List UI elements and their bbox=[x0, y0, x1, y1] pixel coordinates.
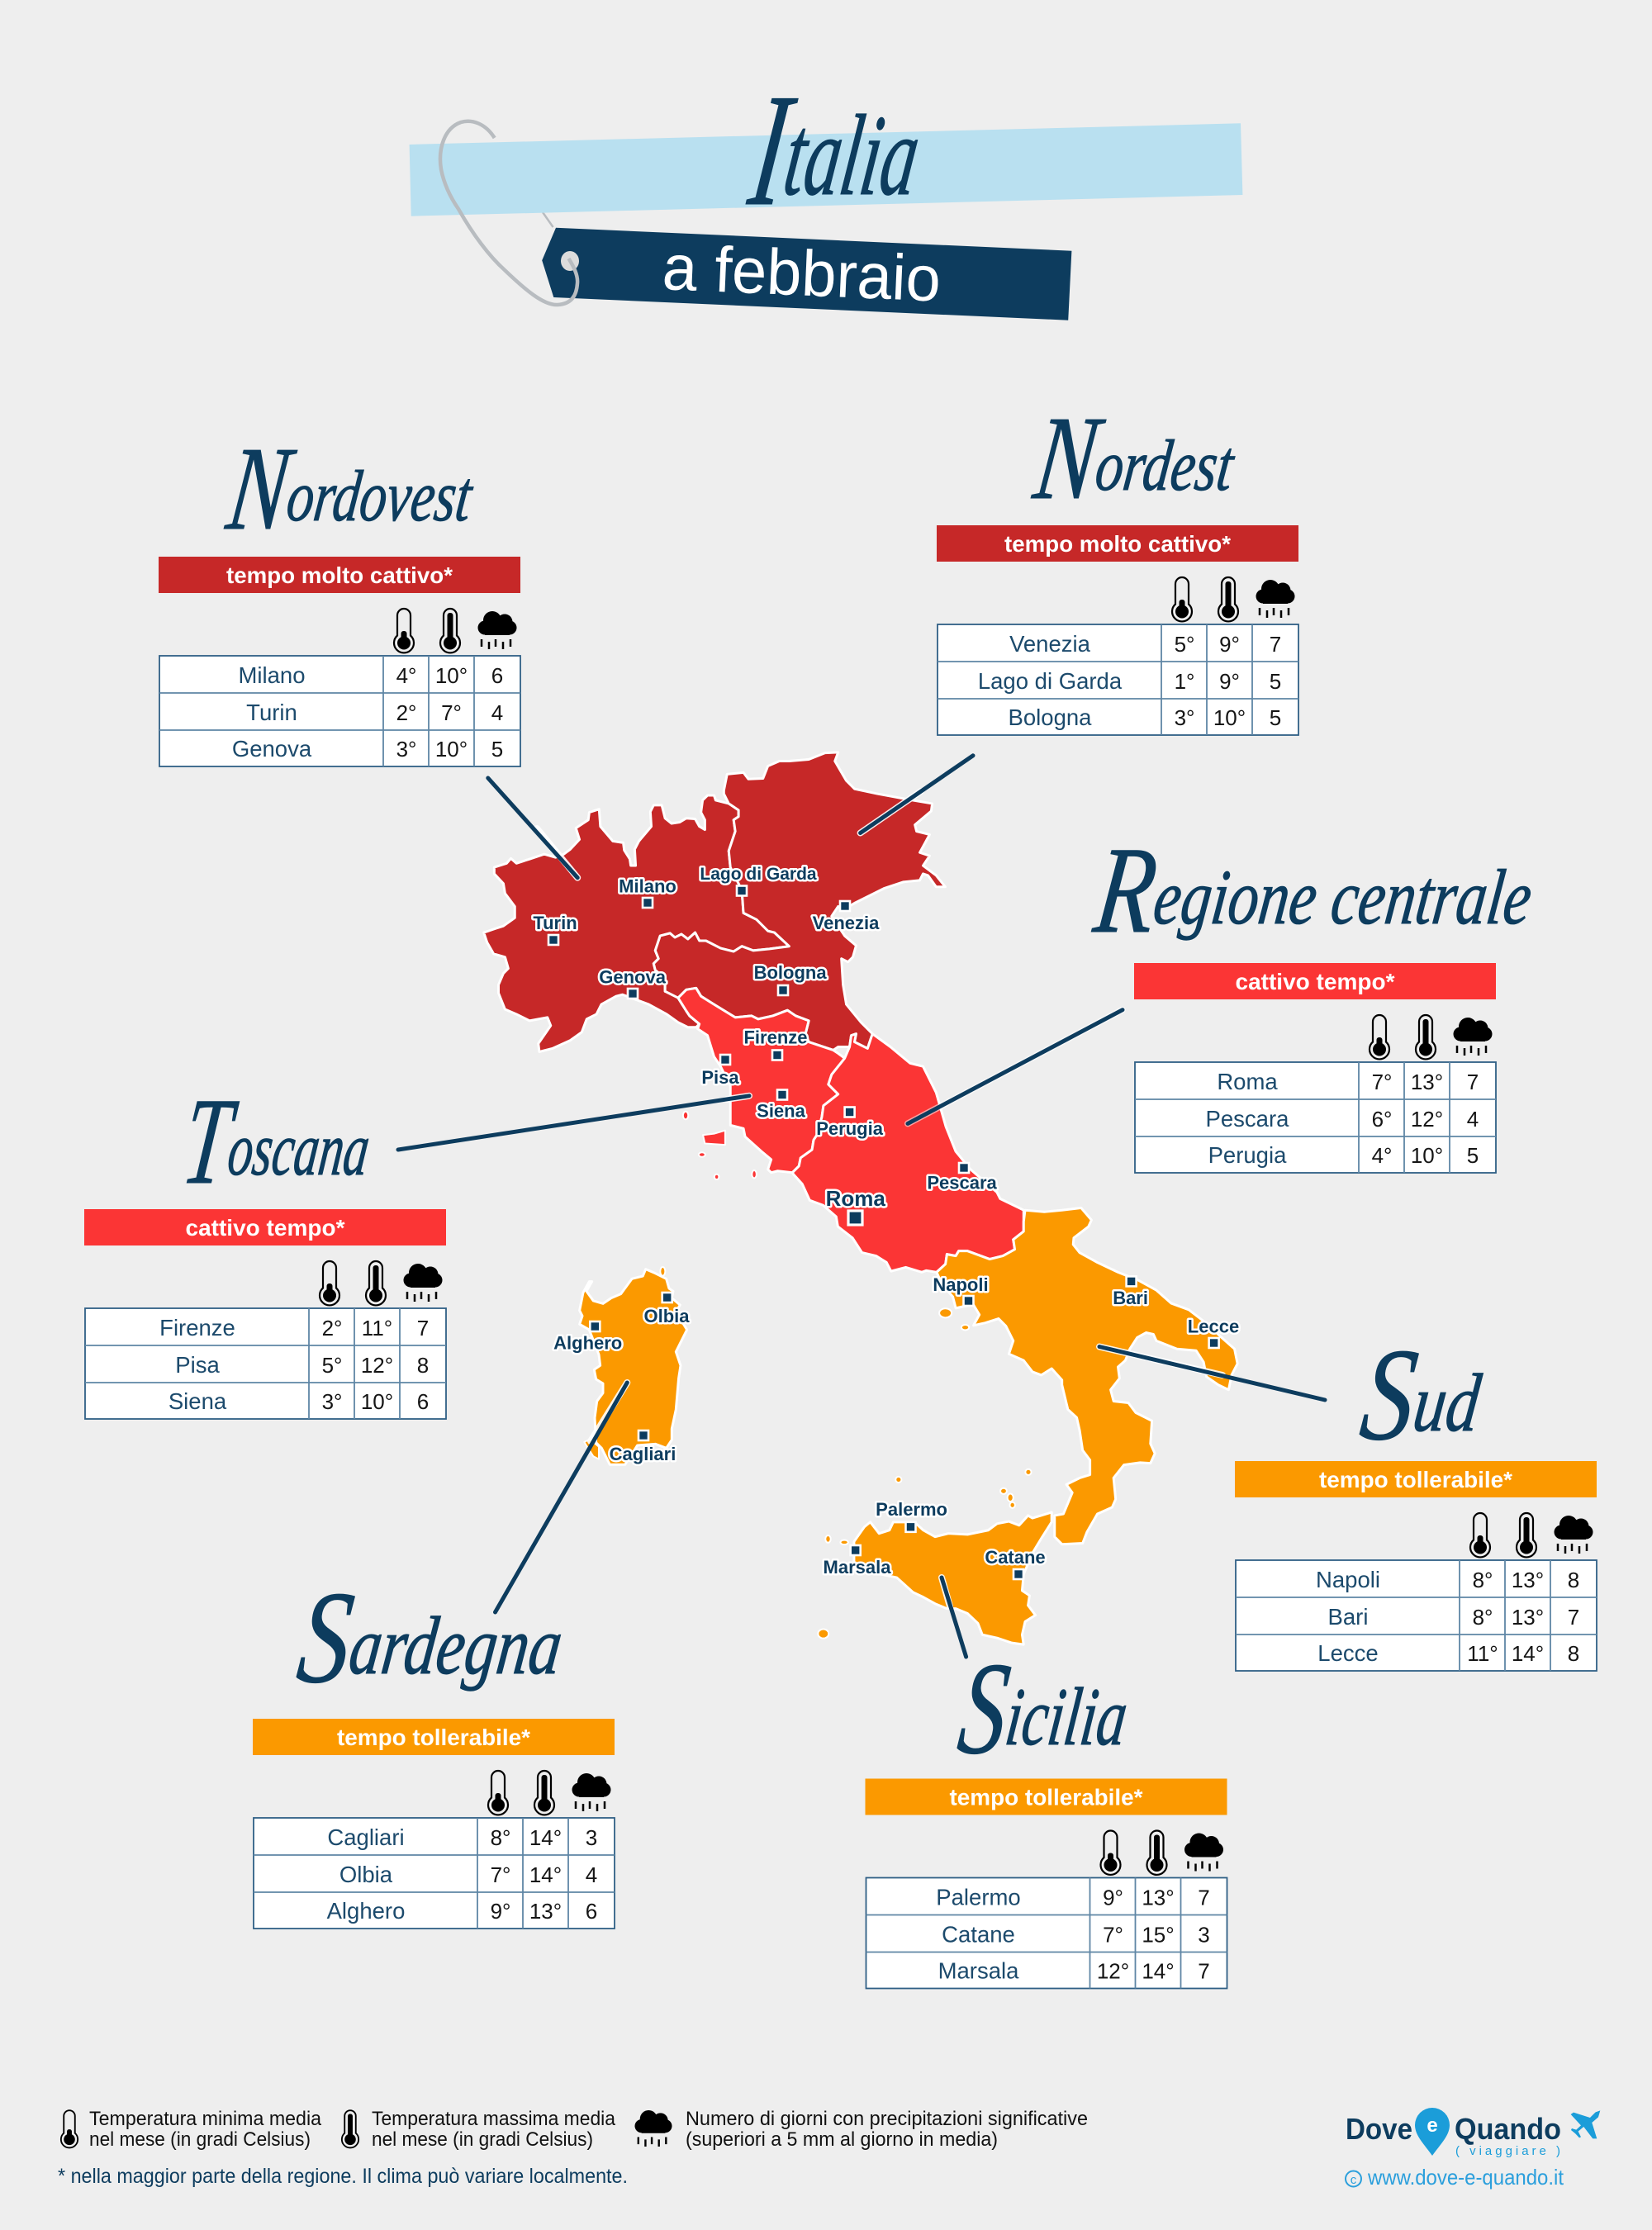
rating band bbox=[253, 1719, 615, 1755]
climate table: Marsala bbox=[938, 1957, 1019, 1984]
climate table: 7° bbox=[1372, 1070, 1392, 1094]
climate table: Perugia bbox=[1208, 1142, 1287, 1168]
icons: min temp, max temp, rain days bbox=[394, 609, 517, 652]
rating band bbox=[159, 557, 520, 593]
climate table: Bari bbox=[1328, 1604, 1368, 1630]
climate table bbox=[938, 624, 1298, 735]
panel: Nordovest bbox=[159, 422, 520, 766]
city: Alghero: Alghero bbox=[553, 1333, 622, 1353]
heading: Sud: ud bbox=[1408, 1357, 1486, 1449]
line: Toscana bbox=[398, 1096, 749, 1150]
tag cord bbox=[440, 121, 577, 305]
city: Alghero bbox=[553, 1321, 622, 1353]
city: Siena bbox=[757, 1090, 806, 1122]
climate table: 12° bbox=[1097, 1959, 1129, 1984]
wordmark: Dove: Dove bbox=[1346, 2112, 1412, 2146]
heading: Regione centrale: R bbox=[1088, 822, 1164, 959]
climate table: 11° bbox=[1467, 1641, 1498, 1666]
climate table: 5 bbox=[1270, 669, 1281, 694]
city: Bari: Bari bbox=[1113, 1288, 1148, 1308]
panel: Regione centrale bbox=[1088, 822, 1540, 1173]
climate table: 5 bbox=[1467, 1143, 1479, 1168]
climate table: 8 bbox=[417, 1353, 429, 1378]
icons: min temp, max temp, rain days bbox=[1370, 1015, 1492, 1059]
climate table: 14° bbox=[1142, 1959, 1175, 1984]
rating band bbox=[1235, 1461, 1597, 1497]
panel: Toscana bbox=[84, 1073, 446, 1419]
city: Cagliari bbox=[610, 1431, 676, 1464]
climate table: 8 bbox=[1568, 1568, 1579, 1592]
city: Roma bbox=[826, 1186, 885, 1225]
climate table: 10° bbox=[361, 1389, 393, 1414]
rating band: tempo tollerabile* bbox=[950, 1784, 1143, 1810]
city: Pescara: Pescara bbox=[927, 1173, 998, 1193]
climate table: 2° bbox=[396, 700, 416, 725]
city: Siena: Siena bbox=[757, 1100, 806, 1122]
climate table: 13° bbox=[1512, 1605, 1544, 1630]
climate table: 5 bbox=[1270, 705, 1281, 730]
rating band: tempo tollerabile* bbox=[1319, 1467, 1512, 1492]
climate table: Turin bbox=[246, 700, 297, 725]
wordmark: Quando: Quando bbox=[1455, 2112, 1561, 2146]
climate table: 12° bbox=[361, 1353, 393, 1378]
line: Nordest bbox=[861, 756, 973, 833]
subtitle: a febbraio bbox=[661, 230, 942, 316]
city: Turin: Turin bbox=[533, 913, 577, 933]
climate table: 3° bbox=[396, 737, 416, 762]
climate table: 4° bbox=[1372, 1143, 1392, 1168]
city: Perugia bbox=[816, 1107, 884, 1139]
climate table: Palermo bbox=[936, 1885, 1021, 1910]
climate table: 14° bbox=[529, 1825, 562, 1850]
climate table: 8° bbox=[1473, 1568, 1493, 1592]
legend bbox=[58, 2108, 1088, 2188]
copyright symbol bbox=[1346, 2171, 1361, 2187]
climate table: Venezia bbox=[1009, 631, 1091, 657]
region: Toscana bbox=[678, 988, 845, 1179]
climate table: 10° bbox=[435, 737, 468, 762]
tag hole bbox=[561, 251, 579, 271]
climate table: 4° bbox=[396, 663, 416, 688]
heading: Nordovest: ordovest bbox=[282, 456, 477, 537]
line: Sicilia bbox=[942, 1578, 966, 1657]
rating band: tempo tollerabile* bbox=[337, 1725, 530, 1750]
region: Sardegna bbox=[580, 1267, 687, 1464]
legend item: maximum temperature: Temperatura massima media bbox=[372, 2108, 616, 2130]
climate table: 2° bbox=[322, 1316, 342, 1340]
climate table: Alghero bbox=[327, 1898, 405, 1924]
icons: min temp, max temp, rain days bbox=[1100, 1830, 1223, 1875]
climate table: 7 bbox=[1467, 1070, 1479, 1094]
climate table: 1° bbox=[1175, 669, 1194, 694]
climate table: 7° bbox=[1103, 1923, 1123, 1948]
rating band: cattivo tempo* bbox=[185, 1215, 345, 1241]
climate table: 3 bbox=[586, 1825, 597, 1850]
climate table: Siena bbox=[169, 1388, 227, 1414]
panel: Sicilia bbox=[866, 1635, 1227, 1989]
city: Pisa bbox=[701, 1055, 739, 1088]
climate table: Pescara bbox=[1206, 1106, 1289, 1132]
city: Napoli: Napoli bbox=[933, 1274, 989, 1295]
heading: Nordovest: N bbox=[220, 422, 301, 555]
panel: Nordest bbox=[937, 391, 1298, 735]
city: Bari bbox=[1113, 1276, 1148, 1308]
icons: min temp, max temp, rain days bbox=[488, 1771, 611, 1815]
city: Venezia: Venezia bbox=[813, 913, 880, 933]
climate table: 12° bbox=[1411, 1107, 1443, 1132]
climate table bbox=[254, 1818, 615, 1929]
climate table: 5° bbox=[322, 1353, 342, 1378]
city: Cagliari: Cagliari bbox=[610, 1444, 676, 1464]
legend item: maximum temperature: nel mese (in gradi Celsius) bbox=[372, 2128, 593, 2151]
climate table: 8° bbox=[1473, 1605, 1493, 1630]
website: www.dove-e-quando.it bbox=[1367, 2165, 1564, 2190]
region: Sud bbox=[895, 1208, 1237, 1544]
rating band bbox=[1134, 963, 1496, 999]
copyright symbol: c bbox=[1351, 2173, 1357, 2187]
climate table: 10° bbox=[1411, 1143, 1443, 1168]
climate table: 10° bbox=[435, 663, 468, 688]
climate table: 13° bbox=[529, 1899, 562, 1924]
price tag bbox=[542, 228, 1071, 320]
climate table: 5 bbox=[491, 737, 503, 762]
city: Olbia bbox=[643, 1293, 690, 1326]
title block bbox=[410, 61, 1242, 320]
climate table: 4 bbox=[1467, 1107, 1479, 1132]
icons: min temp, max temp, rain days bbox=[1470, 1513, 1593, 1557]
climate table: 6 bbox=[417, 1389, 429, 1414]
heading: Toscana: T bbox=[177, 1073, 243, 1210]
climate table: Catane bbox=[942, 1921, 1015, 1948]
climate table bbox=[85, 1308, 446, 1419]
climate table: 4 bbox=[491, 700, 503, 725]
city: Bologna: Bologna bbox=[754, 962, 827, 983]
climate table: 7 bbox=[417, 1316, 429, 1340]
icon: location pin: e bbox=[1427, 2114, 1438, 2137]
climate table bbox=[866, 1878, 1227, 1989]
legend item: minimum temperature bbox=[61, 2108, 322, 2151]
icons: min temp, max temp, rain days bbox=[1172, 577, 1295, 621]
region: Regione centrale bbox=[792, 1034, 1023, 1272]
rating band bbox=[866, 1779, 1227, 1815]
city: Palermo: Palermo bbox=[876, 1499, 947, 1520]
city: Marsala bbox=[824, 1545, 891, 1578]
city: Turin bbox=[533, 913, 577, 945]
city: Pisa: Pisa bbox=[701, 1067, 739, 1088]
climate table: 7 bbox=[1198, 1885, 1210, 1910]
rating band: tempo molto cattivo* bbox=[1004, 531, 1231, 557]
city: Milano: Milano bbox=[619, 875, 676, 897]
city: Lecce: Lecce bbox=[1188, 1317, 1239, 1336]
title ribbon bbox=[410, 123, 1242, 216]
heading: Sardegna: ardegna bbox=[344, 1600, 567, 1691]
climate table: 9° bbox=[1219, 669, 1240, 694]
climate table: Firenze bbox=[159, 1315, 235, 1340]
climate table: 3° bbox=[1175, 705, 1194, 730]
heading: Nordest: N bbox=[1027, 391, 1110, 524]
region: Nordest bbox=[653, 752, 945, 1050]
tagline: ( viaggiare ) bbox=[1455, 2144, 1560, 2158]
city: Bologna bbox=[754, 962, 827, 995]
panel: Sardegna bbox=[253, 1564, 615, 1929]
icon: plane bbox=[1571, 2110, 1600, 2138]
heading: Regione centrale: egione centrale bbox=[1149, 853, 1536, 941]
legend item: rain days bbox=[634, 2108, 1088, 2151]
climate table bbox=[159, 656, 520, 766]
rating band bbox=[937, 525, 1298, 562]
climate table: Pisa bbox=[175, 1352, 220, 1378]
line: Sud bbox=[1099, 1346, 1325, 1400]
city: Lecce bbox=[1188, 1317, 1239, 1348]
panel: Sud bbox=[1235, 1321, 1597, 1671]
city markers and labels bbox=[533, 865, 1239, 1579]
climate table: 13° bbox=[1512, 1568, 1544, 1592]
legend item: rain days: (superiori a 5 mm al giorno in media) bbox=[686, 2128, 998, 2151]
climate table: Bologna bbox=[1009, 705, 1092, 730]
climate table: 7° bbox=[441, 700, 462, 725]
climate table: Cagliari bbox=[327, 1824, 405, 1850]
city: Perugia: Perugia bbox=[816, 1118, 884, 1139]
city: Genova bbox=[599, 966, 667, 999]
climate table: Roma bbox=[1217, 1069, 1278, 1094]
climate table: 14° bbox=[1512, 1641, 1544, 1666]
climate table: 3 bbox=[1198, 1923, 1210, 1948]
climate table: 3° bbox=[322, 1389, 342, 1414]
city: Catane: Catane bbox=[985, 1547, 1046, 1568]
tag cord stub bbox=[543, 212, 553, 227]
climate table: 5° bbox=[1175, 632, 1194, 657]
city: Firenze bbox=[743, 1027, 808, 1060]
climate table: 7 bbox=[1270, 632, 1281, 657]
leader lines bbox=[398, 756, 1325, 1657]
heading: Sicilia: S bbox=[952, 1635, 1017, 1782]
rating band bbox=[84, 1209, 446, 1245]
climate table: Lago di Garda bbox=[978, 668, 1123, 694]
climate table: 14° bbox=[529, 1862, 562, 1887]
city: Lago di Garda: Lago di Garda bbox=[700, 865, 817, 884]
city: Napoli bbox=[933, 1274, 989, 1306]
line: Regione centrale bbox=[908, 1010, 1123, 1123]
climate table: 7 bbox=[1568, 1605, 1579, 1630]
climate table: 6 bbox=[586, 1899, 597, 1924]
climate table: 15° bbox=[1142, 1923, 1175, 1948]
climate table: 7° bbox=[491, 1862, 510, 1887]
climate table: 10° bbox=[1213, 705, 1246, 730]
footnote: * nella maggior parte della regione. Il clima può variare localmente. bbox=[58, 2165, 628, 2188]
title: Italia: I bbox=[741, 61, 804, 240]
logo: Dove e Quando bbox=[1346, 2108, 1600, 2190]
line: Nordovest bbox=[488, 778, 577, 878]
heading: Sardegna: S bbox=[291, 1564, 360, 1710]
rating band: cattivo tempo* bbox=[1236, 969, 1395, 994]
climate table: 9° bbox=[491, 1899, 510, 1924]
legend item: rain days: Numero di giorni con precipitazioni significative bbox=[686, 2108, 1088, 2130]
climate table: 8° bbox=[491, 1825, 510, 1850]
line: Sardegna bbox=[496, 1383, 627, 1612]
rating band: tempo molto cattivo* bbox=[226, 562, 453, 588]
map of Italy bbox=[484, 752, 1237, 1644]
city: Roma: Roma bbox=[826, 1186, 885, 1211]
climate table: 6° bbox=[1372, 1107, 1392, 1132]
climate table: 13° bbox=[1142, 1885, 1175, 1910]
climate table: 6 bbox=[491, 663, 503, 688]
city: Milano bbox=[619, 875, 676, 908]
climate table: 9° bbox=[1219, 632, 1240, 657]
climate table: 4 bbox=[586, 1862, 597, 1887]
legend item: minimum temperature: nel mese (in gradi Celsius) bbox=[89, 2128, 311, 2151]
climate table: 11° bbox=[362, 1316, 392, 1340]
climate table: Olbia bbox=[339, 1862, 393, 1887]
legend item: minimum temperature: Temperatura minima media bbox=[89, 2108, 322, 2130]
heading: Toscana: oscana bbox=[224, 1107, 374, 1191]
climate table bbox=[1236, 1560, 1597, 1671]
city: Olbia: Olbia bbox=[643, 1306, 690, 1326]
region: Sicilia bbox=[818, 1512, 1051, 1644]
climate table: Milano bbox=[238, 662, 306, 688]
icons: min temp, max temp, rain days bbox=[320, 1261, 443, 1305]
climate table: 13° bbox=[1411, 1070, 1443, 1094]
heading: Sud: S bbox=[1354, 1321, 1424, 1468]
city: Pescara bbox=[927, 1163, 998, 1193]
city: Venezia bbox=[813, 901, 880, 933]
title: Italia: talia bbox=[777, 93, 927, 220]
climate table: 7 bbox=[1198, 1959, 1210, 1984]
city: Palermo bbox=[876, 1499, 947, 1532]
city: Firenze: Firenze bbox=[743, 1027, 808, 1047]
climate table: 9° bbox=[1103, 1885, 1123, 1910]
city: Genova: Genova bbox=[599, 966, 667, 988]
climate table: Lecce bbox=[1317, 1640, 1379, 1666]
heading: Sicilia: icilia bbox=[1001, 1671, 1132, 1763]
city: Lago di Garda bbox=[700, 865, 817, 895]
region: Nordovest bbox=[484, 795, 789, 1051]
climate table: 8 bbox=[1568, 1641, 1579, 1666]
city: Marsala: Marsala bbox=[824, 1557, 891, 1578]
city: Catane bbox=[985, 1547, 1046, 1579]
heading: Nordest: ordest bbox=[1091, 425, 1239, 506]
climate table bbox=[1135, 1062, 1496, 1173]
legend item: maximum temperature bbox=[342, 2108, 616, 2151]
climate table: Napoli bbox=[1316, 1567, 1380, 1592]
icon: location pin bbox=[1415, 2108, 1450, 2156]
climate table: Genova bbox=[232, 736, 312, 762]
